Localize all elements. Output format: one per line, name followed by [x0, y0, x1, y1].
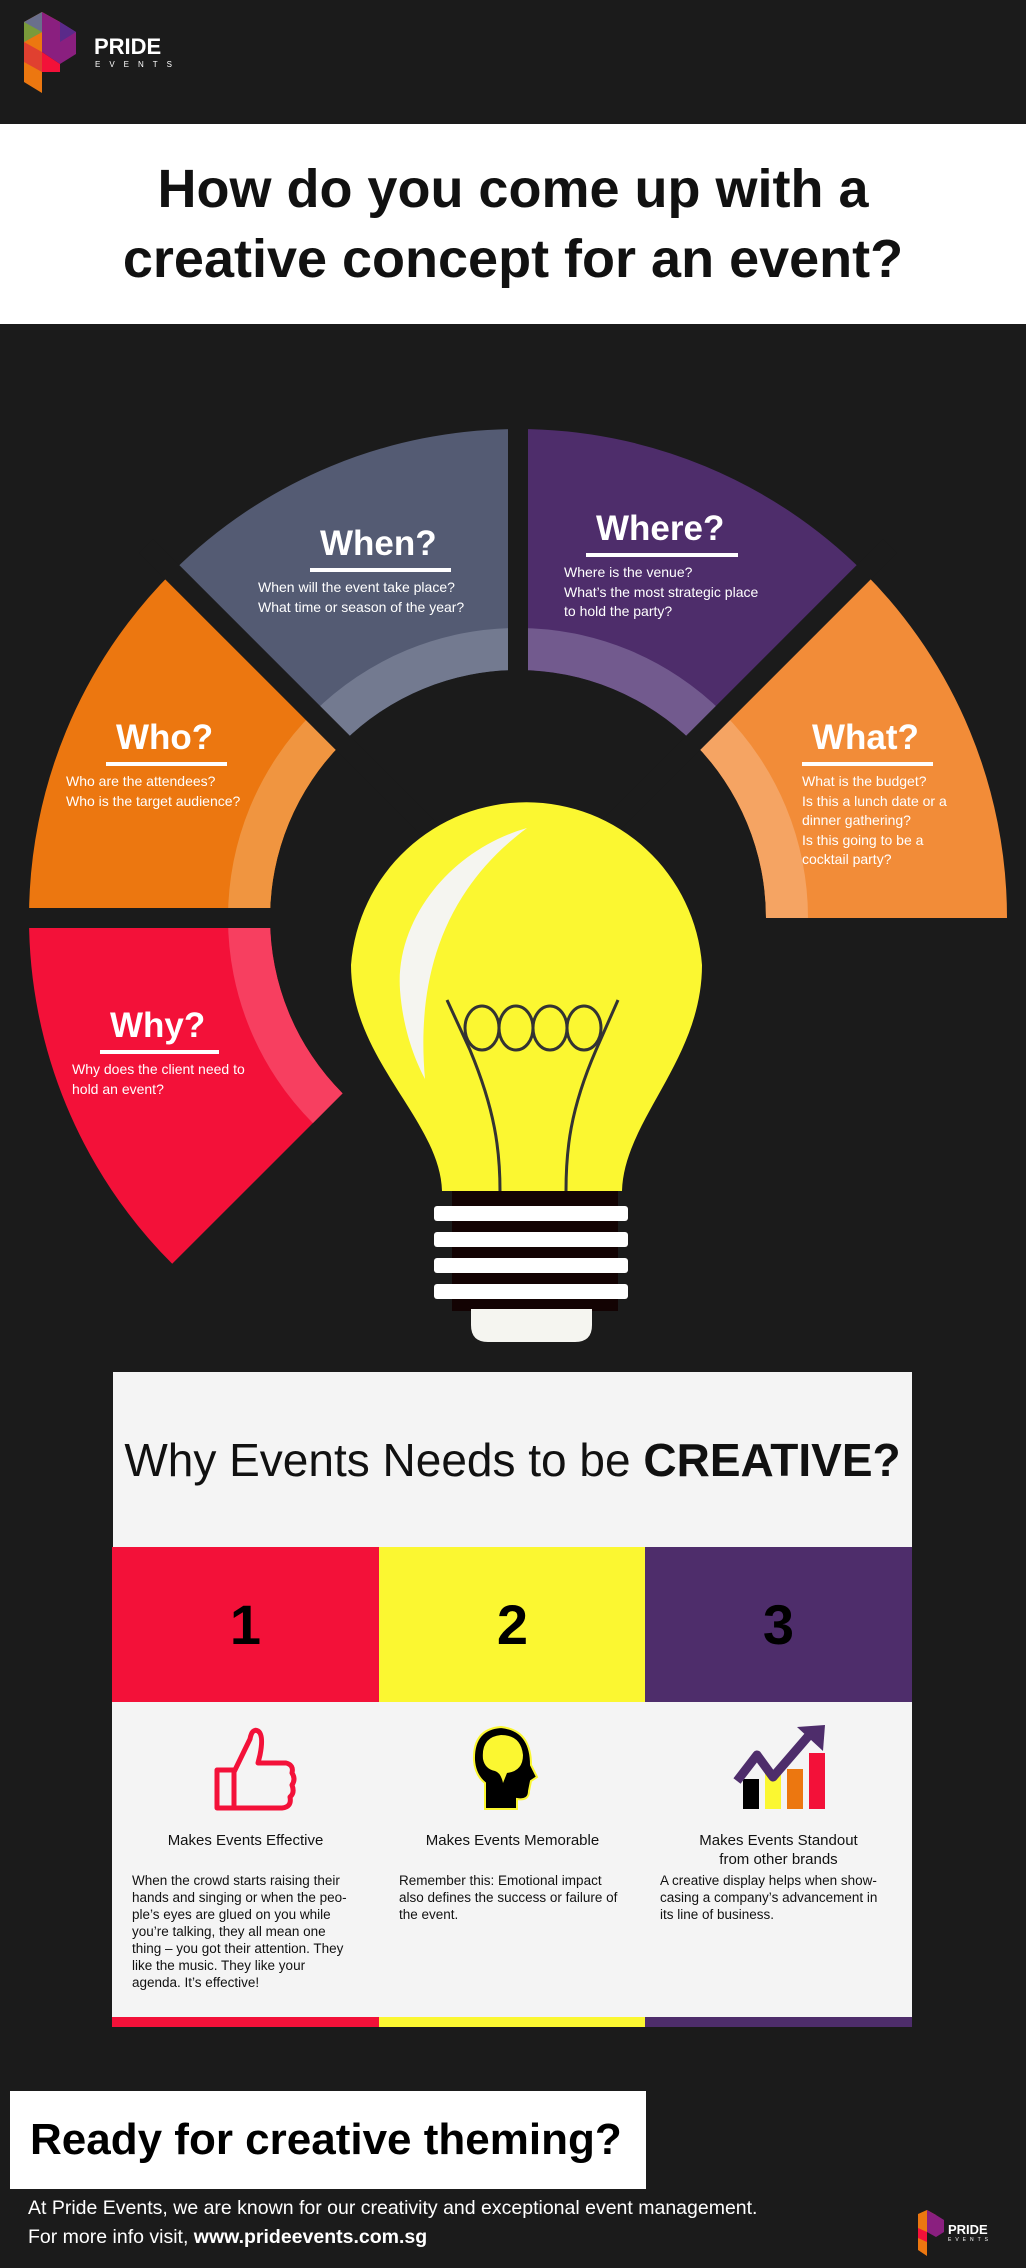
text: where: Where?	[596, 509, 724, 548]
panel: reason 3: A creative display helps when show-	[660, 1873, 877, 1888]
text: when: When?	[320, 524, 437, 563]
panel: reason 2: also defines the success or failure of	[399, 1890, 617, 1905]
text: where	[564, 509, 758, 619]
panel: reason 2: 2	[497, 1593, 528, 1656]
text: why: hold an event?	[72, 1080, 164, 1096]
text: when: When will the event take place?	[258, 579, 455, 595]
panel: reason 1: you’re talking, they all mean one	[132, 1924, 326, 1939]
text: what: What is the budget?	[802, 773, 927, 789]
panel: reason 3	[645, 1547, 912, 2027]
callout: ready for creative theming: Ready for creative theming?	[30, 2115, 622, 2164]
segment: what	[693, 572, 1007, 918]
panel: why creative heading	[113, 1372, 912, 1547]
text: what: Is this going to be a	[802, 832, 923, 848]
text: what	[802, 718, 947, 867]
text: what: cocktail party?	[802, 851, 891, 867]
panel: reason 2	[379, 1547, 646, 2027]
footer text: At Pride Events, we are known for our creativity and exceptional event management.	[28, 2197, 757, 2219]
text: what: What?	[812, 718, 919, 757]
panel: reason 1: Makes Events Effective	[168, 1832, 323, 1849]
text: why: Why does the client need to	[72, 1061, 245, 1077]
text: who	[66, 718, 240, 809]
footer text	[28, 2197, 757, 2248]
icon: head with brain	[472, 1726, 538, 1810]
title band: How do you come up with a	[157, 159, 868, 219]
logo: Pride Events header	[24, 12, 181, 93]
panel: reason 2: Makes Events Memorable	[426, 1832, 599, 1849]
footer text: For more info visit, www.prideevents.com.sg	[28, 2226, 427, 2248]
panel: reason 3: from other brands	[719, 1851, 838, 1868]
logo: Pride Events header: EVENTS	[95, 60, 181, 69]
panel: reason 2: Remember this: Emotional impact	[399, 1873, 602, 1888]
icon: growth chart	[734, 1725, 825, 1809]
panel: reason 3: Makes Events Standout	[699, 1832, 858, 1849]
text: where: Where is the venue?	[564, 564, 692, 580]
text: where: What’s the most strategic place	[564, 584, 758, 600]
text: when	[258, 524, 464, 615]
panel: reason 1: hands and singing or when the peo-	[132, 1890, 347, 1905]
logo: footer: PRIDE	[948, 2222, 988, 2237]
title band: creative concept for an event?	[123, 229, 903, 289]
segment: why	[29, 918, 343, 1264]
logo: footer: EVENTS	[948, 2237, 992, 2243]
panel: reason 3: 3	[763, 1593, 794, 1656]
panel: why creative heading: CREATIVE?	[643, 1434, 901, 1486]
panel: reason 1: ple’s eyes are glued on you while	[132, 1907, 331, 1922]
panel: reason 1: agenda. It’s effective!	[132, 1975, 259, 1990]
segment: when	[172, 429, 518, 743]
semicircle question wheel	[29, 429, 1007, 1342]
logo: footer	[918, 2210, 992, 2256]
logo: Pride Events header: PRIDE	[94, 34, 161, 59]
title band	[0, 124, 1026, 324]
icon: light bulb	[351, 802, 702, 1342]
text: why: Why?	[110, 1006, 205, 1045]
panel: reason 1	[112, 1547, 379, 2027]
panel: reason 1: like the music. They like your	[132, 1958, 305, 1973]
text: who: Who is the target audience?	[66, 792, 240, 808]
text: who: Who?	[116, 718, 213, 757]
text: when: What time or season of the year?	[258, 598, 464, 614]
panel: reason 3: casing a company’s advancement in	[660, 1890, 877, 1905]
panel: reason 2: the event.	[399, 1907, 458, 1922]
panel: reason 1: 1	[230, 1593, 261, 1656]
text: what: dinner gathering?	[802, 812, 911, 828]
text: why	[72, 1006, 245, 1096]
panel: reason 3: its line of business.	[660, 1907, 774, 1922]
panel: why creative heading: Why Events Needs to be	[124, 1434, 631, 1486]
segment: who	[29, 572, 343, 918]
text: where: to hold the party?	[564, 603, 672, 619]
callout: ready for creative theming	[10, 2091, 646, 2189]
panel: reason 1: thing – you got their attention. They	[132, 1941, 343, 1956]
text: what: Is this a lunch date or a	[802, 792, 947, 808]
segment: where	[518, 429, 864, 743]
panel: reason 1: When the crowd starts raising their	[132, 1873, 340, 1888]
icon: thumbs up	[214, 1728, 297, 1810]
text: who: Who are the attendees?	[66, 773, 215, 789]
